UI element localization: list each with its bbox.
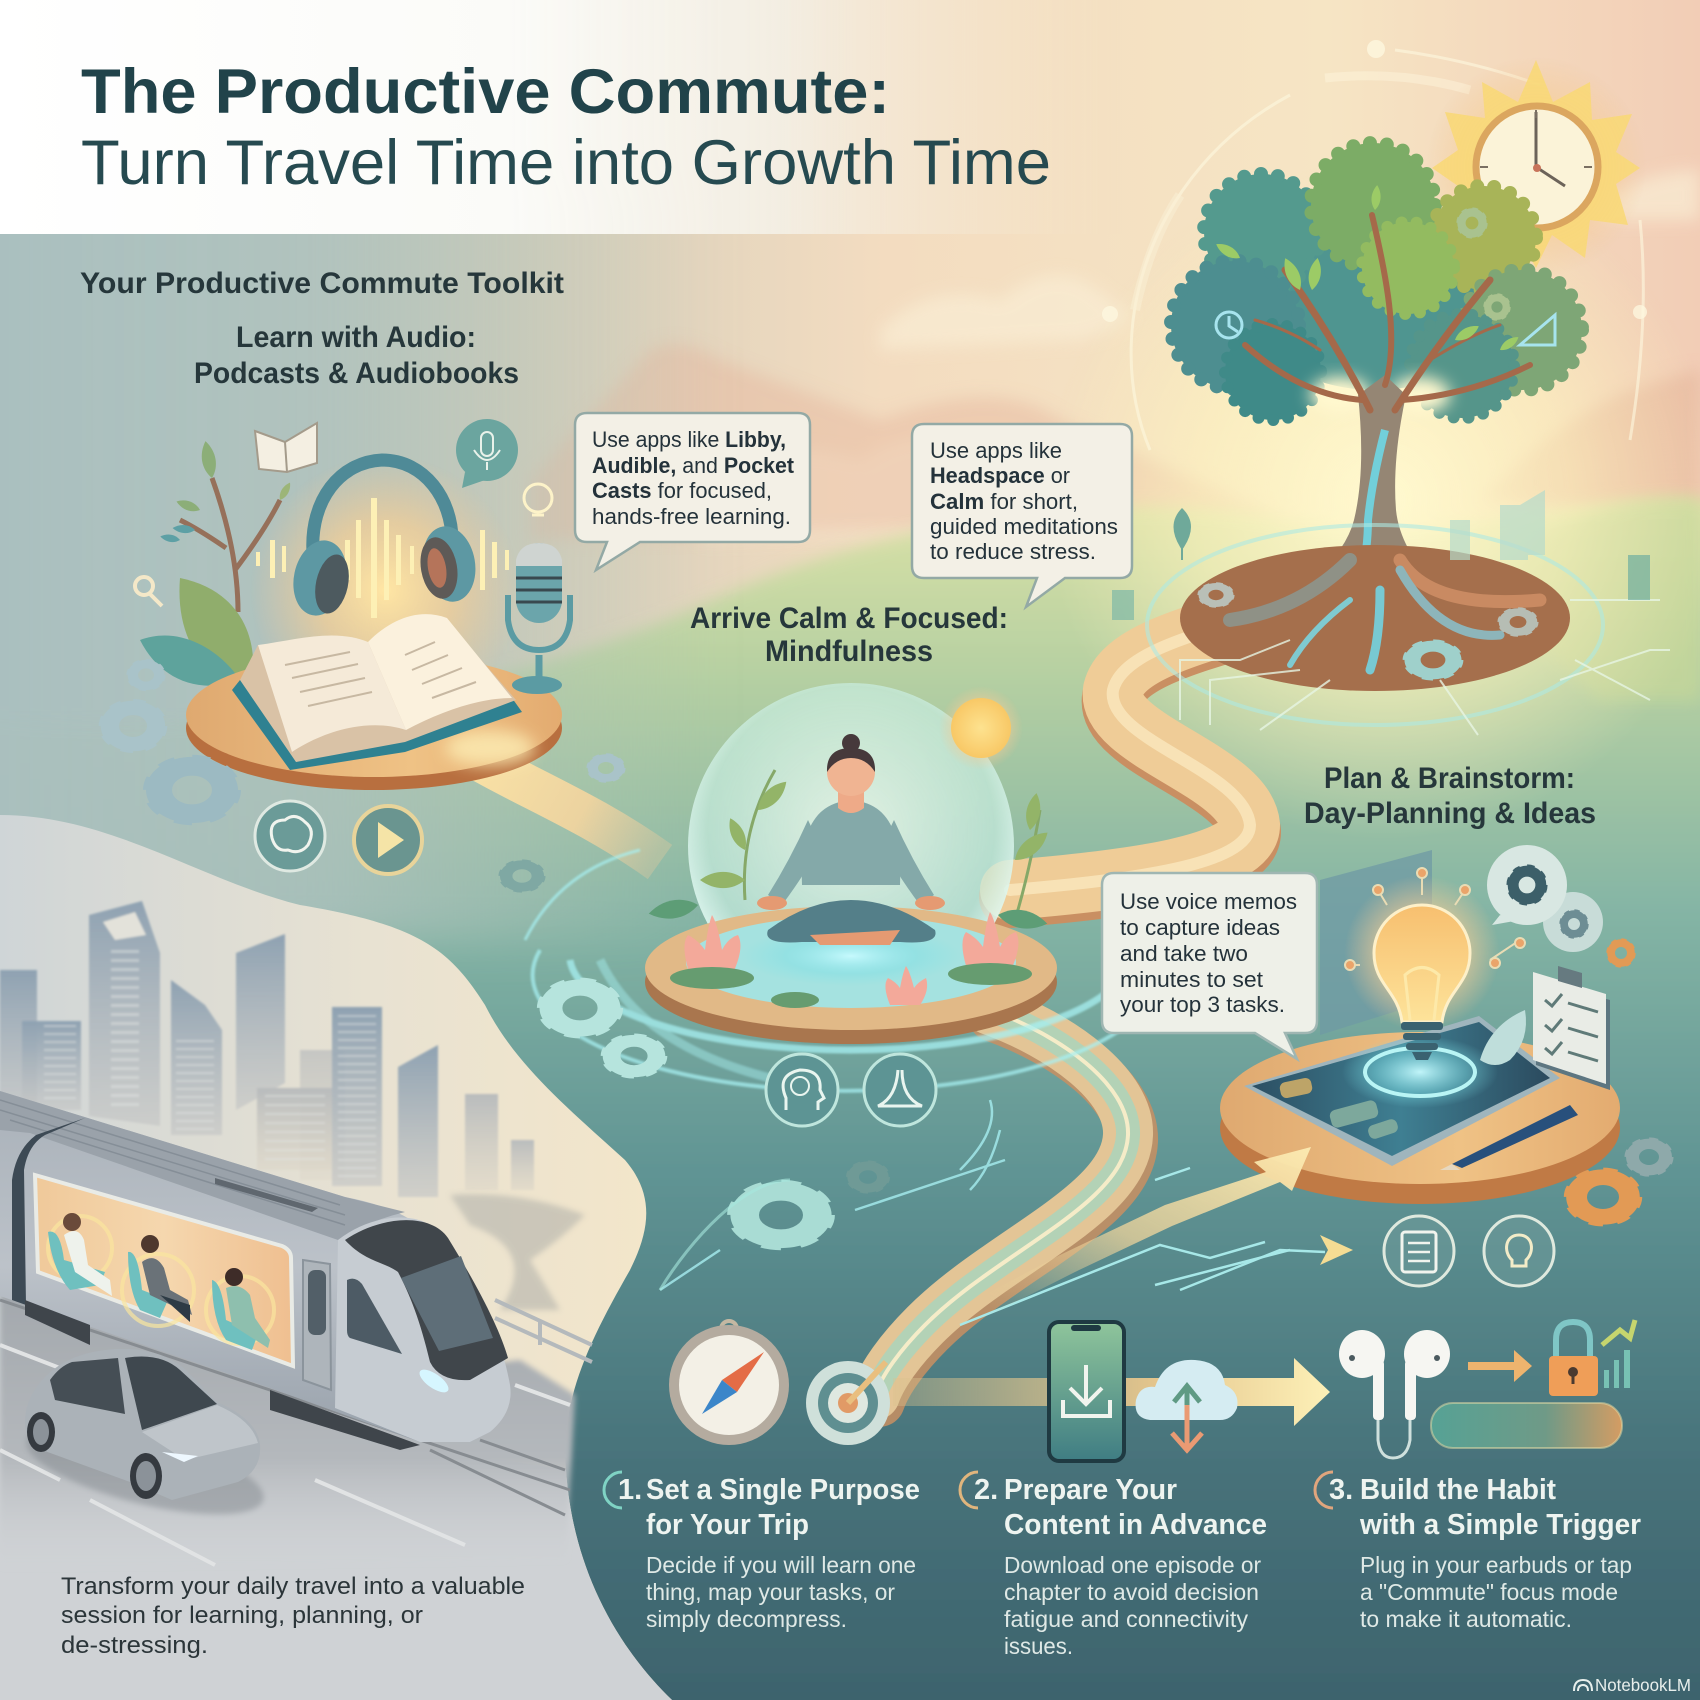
road	[0, 1290, 575, 1570]
step heading: Build the Habit	[1360, 1474, 1556, 1506]
water ripples	[525, 850, 1150, 1091]
orange gears	[1573, 942, 1633, 1220]
background: tree glow	[1045, 160, 1700, 840]
rays and nodes	[1345, 868, 1525, 970]
light under crown	[1310, 377, 1450, 413]
step number ring	[604, 1472, 622, 1508]
heading: learn with audio	[194, 321, 519, 390]
step body: a "Commute" focus mode	[1360, 1579, 1618, 1605]
passenger 2	[122, 1235, 194, 1326]
heading: plan and brainstorm: Plan & Brainstorm:	[1324, 762, 1575, 795]
road markings	[0, 1345, 570, 1565]
step heading: 3.	[1329, 1474, 1353, 1506]
callout: audio apps: Audible, and Pocket	[592, 453, 794, 478]
panel: city and commuters	[0, 815, 672, 1700]
illustration: growth tree	[1102, 40, 1670, 735]
heading: arrive calm	[690, 602, 1008, 668]
title: Turn Travel Time into Growth Time	[81, 128, 1051, 198]
side window	[347, 1279, 402, 1354]
step heading: Prepare Your	[1004, 1474, 1177, 1506]
toolkit heading: Your Productive Commute Toolkit	[80, 267, 564, 300]
callout: audio apps	[575, 413, 810, 570]
step heading	[1329, 1474, 1641, 1541]
orbit rings	[1131, 50, 1643, 450]
gears	[106, 662, 621, 817]
train	[0, 1091, 511, 1450]
branches	[1245, 215, 1530, 410]
icon: compass	[669, 1321, 789, 1445]
orbit dots	[1102, 40, 1647, 322]
callout: voice memos: your top 3 tasks.	[1120, 992, 1285, 1017]
icon: head with brain	[766, 1054, 838, 1126]
pen	[1440, 1105, 1578, 1170]
step body	[1360, 1552, 1632, 1632]
open book	[232, 614, 522, 770]
background: hill highlight	[1480, 498, 1700, 700]
step body: Download one episode or	[1004, 1552, 1261, 1578]
road: learn to mindfulness	[465, 752, 660, 862]
step body	[646, 1552, 916, 1632]
circuit lines	[1180, 600, 1670, 735]
heading: learn with audio: Podcasts & Audiobooks	[194, 357, 519, 390]
platform	[645, 906, 1057, 1044]
callout: meditation apps: guided meditations	[930, 514, 1118, 539]
callout: meditation apps: Headspace or	[930, 463, 1070, 488]
glass bubble	[688, 683, 1014, 1009]
car hood	[142, 1405, 258, 1460]
heading: arrive calm: Mindfulness	[765, 635, 933, 668]
rocket shape	[1480, 1010, 1526, 1065]
magnifier	[135, 577, 162, 606]
studio microphone	[508, 543, 570, 694]
icon: cloud sync	[1136, 1360, 1238, 1450]
light bulb outline	[524, 484, 552, 515]
sound wave	[256, 498, 509, 618]
door	[303, 1260, 331, 1390]
step body	[1004, 1552, 1261, 1659]
title	[81, 57, 1051, 198]
gears	[504, 863, 885, 1242]
grey gear	[1630, 1142, 1668, 1172]
heading: arrive calm: Arrive Calm & Focused:	[690, 602, 1008, 635]
lotus flowers	[684, 912, 1018, 1005]
passenger window	[35, 1175, 293, 1366]
bogies	[25, 1300, 420, 1450]
passenger 1	[48, 1213, 112, 1296]
small tree	[1174, 508, 1191, 560]
small tree	[160, 440, 293, 612]
railing	[495, 1300, 592, 1362]
headphones	[287, 460, 481, 621]
icon: earbuds	[1339, 1330, 1450, 1458]
icon: sun clock	[1426, 57, 1646, 277]
arrow: to plan and brainstorm	[990, 1147, 1311, 1315]
headlight	[416, 1366, 452, 1396]
step body: Decide if you will learn one	[646, 1552, 916, 1578]
callout: voice memos: and take two	[1120, 941, 1248, 966]
icon: nose breathing	[864, 1054, 936, 1126]
icon: target	[806, 1361, 890, 1445]
city skyline	[0, 901, 534, 1197]
road: winding path to tree	[1010, 588, 1340, 897]
callout: meditation apps: to reduce stress.	[930, 539, 1096, 564]
step number ring	[960, 1472, 978, 1508]
cab nose	[335, 1217, 511, 1442]
step heading: Content in Advance	[1004, 1509, 1267, 1541]
step number ring	[1315, 1472, 1333, 1508]
step heading	[974, 1474, 1267, 1541]
tablet	[1244, 1016, 1560, 1166]
distant city	[1112, 490, 1650, 620]
thought bubbles with gears	[1487, 845, 1603, 952]
wheels	[27, 1412, 162, 1499]
distant bridge	[450, 1194, 585, 1310]
step body: thing, map your tasks, or	[646, 1579, 895, 1605]
wooden platform	[186, 653, 562, 790]
icon: lock and growth	[1549, 1320, 1635, 1396]
heading: learn with audio: Learn with Audio:	[236, 321, 476, 354]
step heading	[618, 1474, 920, 1541]
step heading: Set a Single Purpose	[646, 1474, 920, 1506]
passenger 3	[206, 1268, 274, 1350]
circuit lines	[660, 1100, 1005, 1290]
plants	[647, 770, 1052, 933]
focus mode bar	[1431, 1403, 1622, 1448]
arrow: step one to three	[893, 1358, 1330, 1426]
callout: voice memos: minutes to set	[1120, 967, 1264, 992]
person meditating	[757, 734, 945, 945]
background: clouds	[700, 170, 1700, 540]
clipboard	[1533, 966, 1610, 1090]
sun	[939, 686, 1023, 770]
icon: play	[354, 806, 422, 874]
icon group: plan and brainstorm	[1220, 845, 1668, 1286]
intro text: de-stressing.	[61, 1632, 208, 1659]
trunk	[1300, 375, 1440, 590]
arrow: small trigger	[1468, 1350, 1532, 1382]
heading: plan and brainstorm: Day-Planning & Ideas	[1304, 797, 1596, 830]
callout: audio apps: Use apps like Libby,	[592, 427, 786, 452]
car windshield	[125, 1356, 217, 1430]
background: mountains	[530, 344, 1700, 540]
intro text: session for learning, planning, or	[61, 1602, 423, 1629]
tree gears	[1460, 211, 1508, 318]
crown back	[1171, 143, 1582, 420]
background: land	[0, 499, 1700, 1700]
train body	[0, 1091, 509, 1442]
step body: fatigue and connectivity	[1004, 1606, 1248, 1632]
light bulb	[1344, 875, 1500, 1060]
car body	[25, 1349, 260, 1500]
lily pads	[670, 963, 1032, 1008]
intro text	[61, 1573, 525, 1659]
back screen	[1320, 850, 1432, 1035]
callout: audio apps: Casts for focused,	[592, 478, 772, 503]
mic speech bubble	[456, 419, 518, 488]
step body: issues.	[1004, 1633, 1073, 1659]
step one icons	[660, 1180, 890, 1445]
headlight	[162, 1452, 198, 1462]
trunk channel	[1345, 430, 1385, 640]
step heading: with a Simple Trigger	[1359, 1509, 1641, 1541]
icon: phone download	[1049, 1322, 1124, 1461]
icon group: mindfulness	[504, 683, 1150, 1290]
callout: voice memos	[1102, 873, 1317, 1059]
roof vent	[215, 1178, 318, 1212]
rail tracks	[0, 1300, 570, 1515]
car side windows	[50, 1358, 125, 1414]
road: mindfulness to step one	[875, 1010, 1132, 1401]
step heading: 1.	[618, 1474, 642, 1506]
step body: Plug in your earbuds or tap	[1360, 1552, 1632, 1578]
roots	[1230, 560, 1540, 670]
heading: plan and brainstorm	[1304, 762, 1596, 830]
step 2	[960, 1472, 1267, 1659]
callout: voice memos: to capture ideas	[1120, 915, 1280, 940]
glow trail	[660, 1180, 790, 1290]
bottom mist	[0, 1380, 672, 1700]
callout: voice memos: Use voice memos	[1120, 889, 1297, 914]
arrow head: thin connector	[1320, 1235, 1353, 1265]
callout: meditation apps: Calm for short,	[930, 489, 1078, 514]
step heading: 2.	[974, 1474, 998, 1506]
carriage joint	[12, 1118, 85, 1305]
mound gears	[1202, 585, 1534, 676]
callout: meditation apps	[912, 424, 1132, 607]
car	[18, 1349, 272, 1533]
tree icons	[1216, 312, 1555, 345]
windshield	[401, 1256, 493, 1351]
icon: brain	[255, 801, 325, 871]
step body: chapter to avoid decision	[1004, 1579, 1259, 1605]
glow behind headphones	[250, 455, 520, 725]
step body: simply decompress.	[646, 1606, 847, 1632]
roof ribs	[0, 1100, 345, 1225]
icon: idea bulb	[1484, 1216, 1554, 1286]
cab roof	[345, 1220, 508, 1380]
mound	[1180, 545, 1570, 691]
step 1	[604, 1472, 920, 1632]
callout: meditation apps: Use apps like	[930, 438, 1062, 463]
city panel background	[0, 815, 672, 1700]
door window	[308, 1270, 326, 1335]
step body: to make it automatic.	[1360, 1606, 1572, 1632]
car shadow	[18, 1407, 272, 1533]
title: The Productive Commute:	[81, 57, 890, 127]
callout: audio apps: hands-free learning.	[592, 504, 791, 529]
intro text: Transform your daily travel into a valuable	[61, 1573, 525, 1600]
ground ring	[1147, 525, 1603, 725]
open book mini	[255, 423, 317, 472]
passengers	[48, 1213, 274, 1350]
leaves	[1214, 185, 1521, 353]
train roof	[0, 1091, 405, 1240]
large leaves	[140, 578, 253, 690]
notebooklm watermark: NotebookLM	[1595, 1675, 1691, 1695]
icon: checklist	[1384, 1216, 1454, 1286]
platform	[1220, 1032, 1620, 1204]
step 3	[1315, 1472, 1641, 1632]
background: left mist	[0, 180, 720, 940]
header band	[0, 0, 1700, 234]
icon group: learn with audio	[106, 419, 621, 874]
thin connector lines	[960, 1168, 1325, 1325]
step heading: for Your Trip	[646, 1509, 809, 1541]
